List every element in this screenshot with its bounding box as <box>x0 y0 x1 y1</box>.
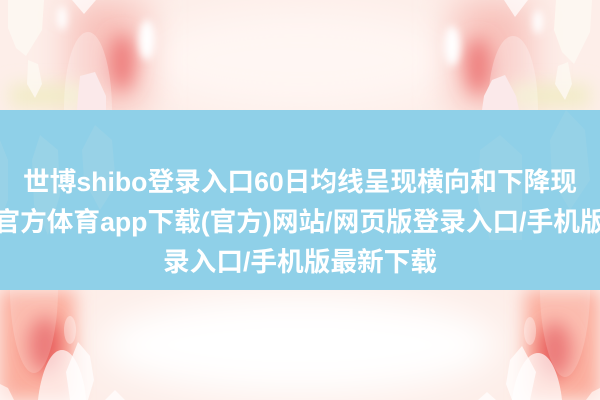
warm yellow tint low on the sides <box>10 85 90 107</box>
red blurred spots <box>109 34 135 90</box>
translucent pink ovals, top <box>64 32 112 110</box>
pale hexagon shapes, top <box>8 0 44 56</box>
headline line 1: 世博shibo登录入口60日均线呈现横向和下降现 <box>23 167 577 197</box>
headline line 3: 录入口/手机版最新下载 <box>163 247 437 277</box>
soft centre glow <box>140 10 460 110</box>
lower pink ovals <box>10 290 58 373</box>
side pink washes <box>70 0 145 110</box>
blue title band <box>0 110 600 290</box>
lower pale hexagons <box>66 342 94 400</box>
white blurred spots <box>139 20 155 60</box>
band texture: faint shapes <box>0 126 116 234</box>
headline line 2: 官方体育app下载(官方)网站/网页版登录入口/手机版 <box>0 207 600 237</box>
